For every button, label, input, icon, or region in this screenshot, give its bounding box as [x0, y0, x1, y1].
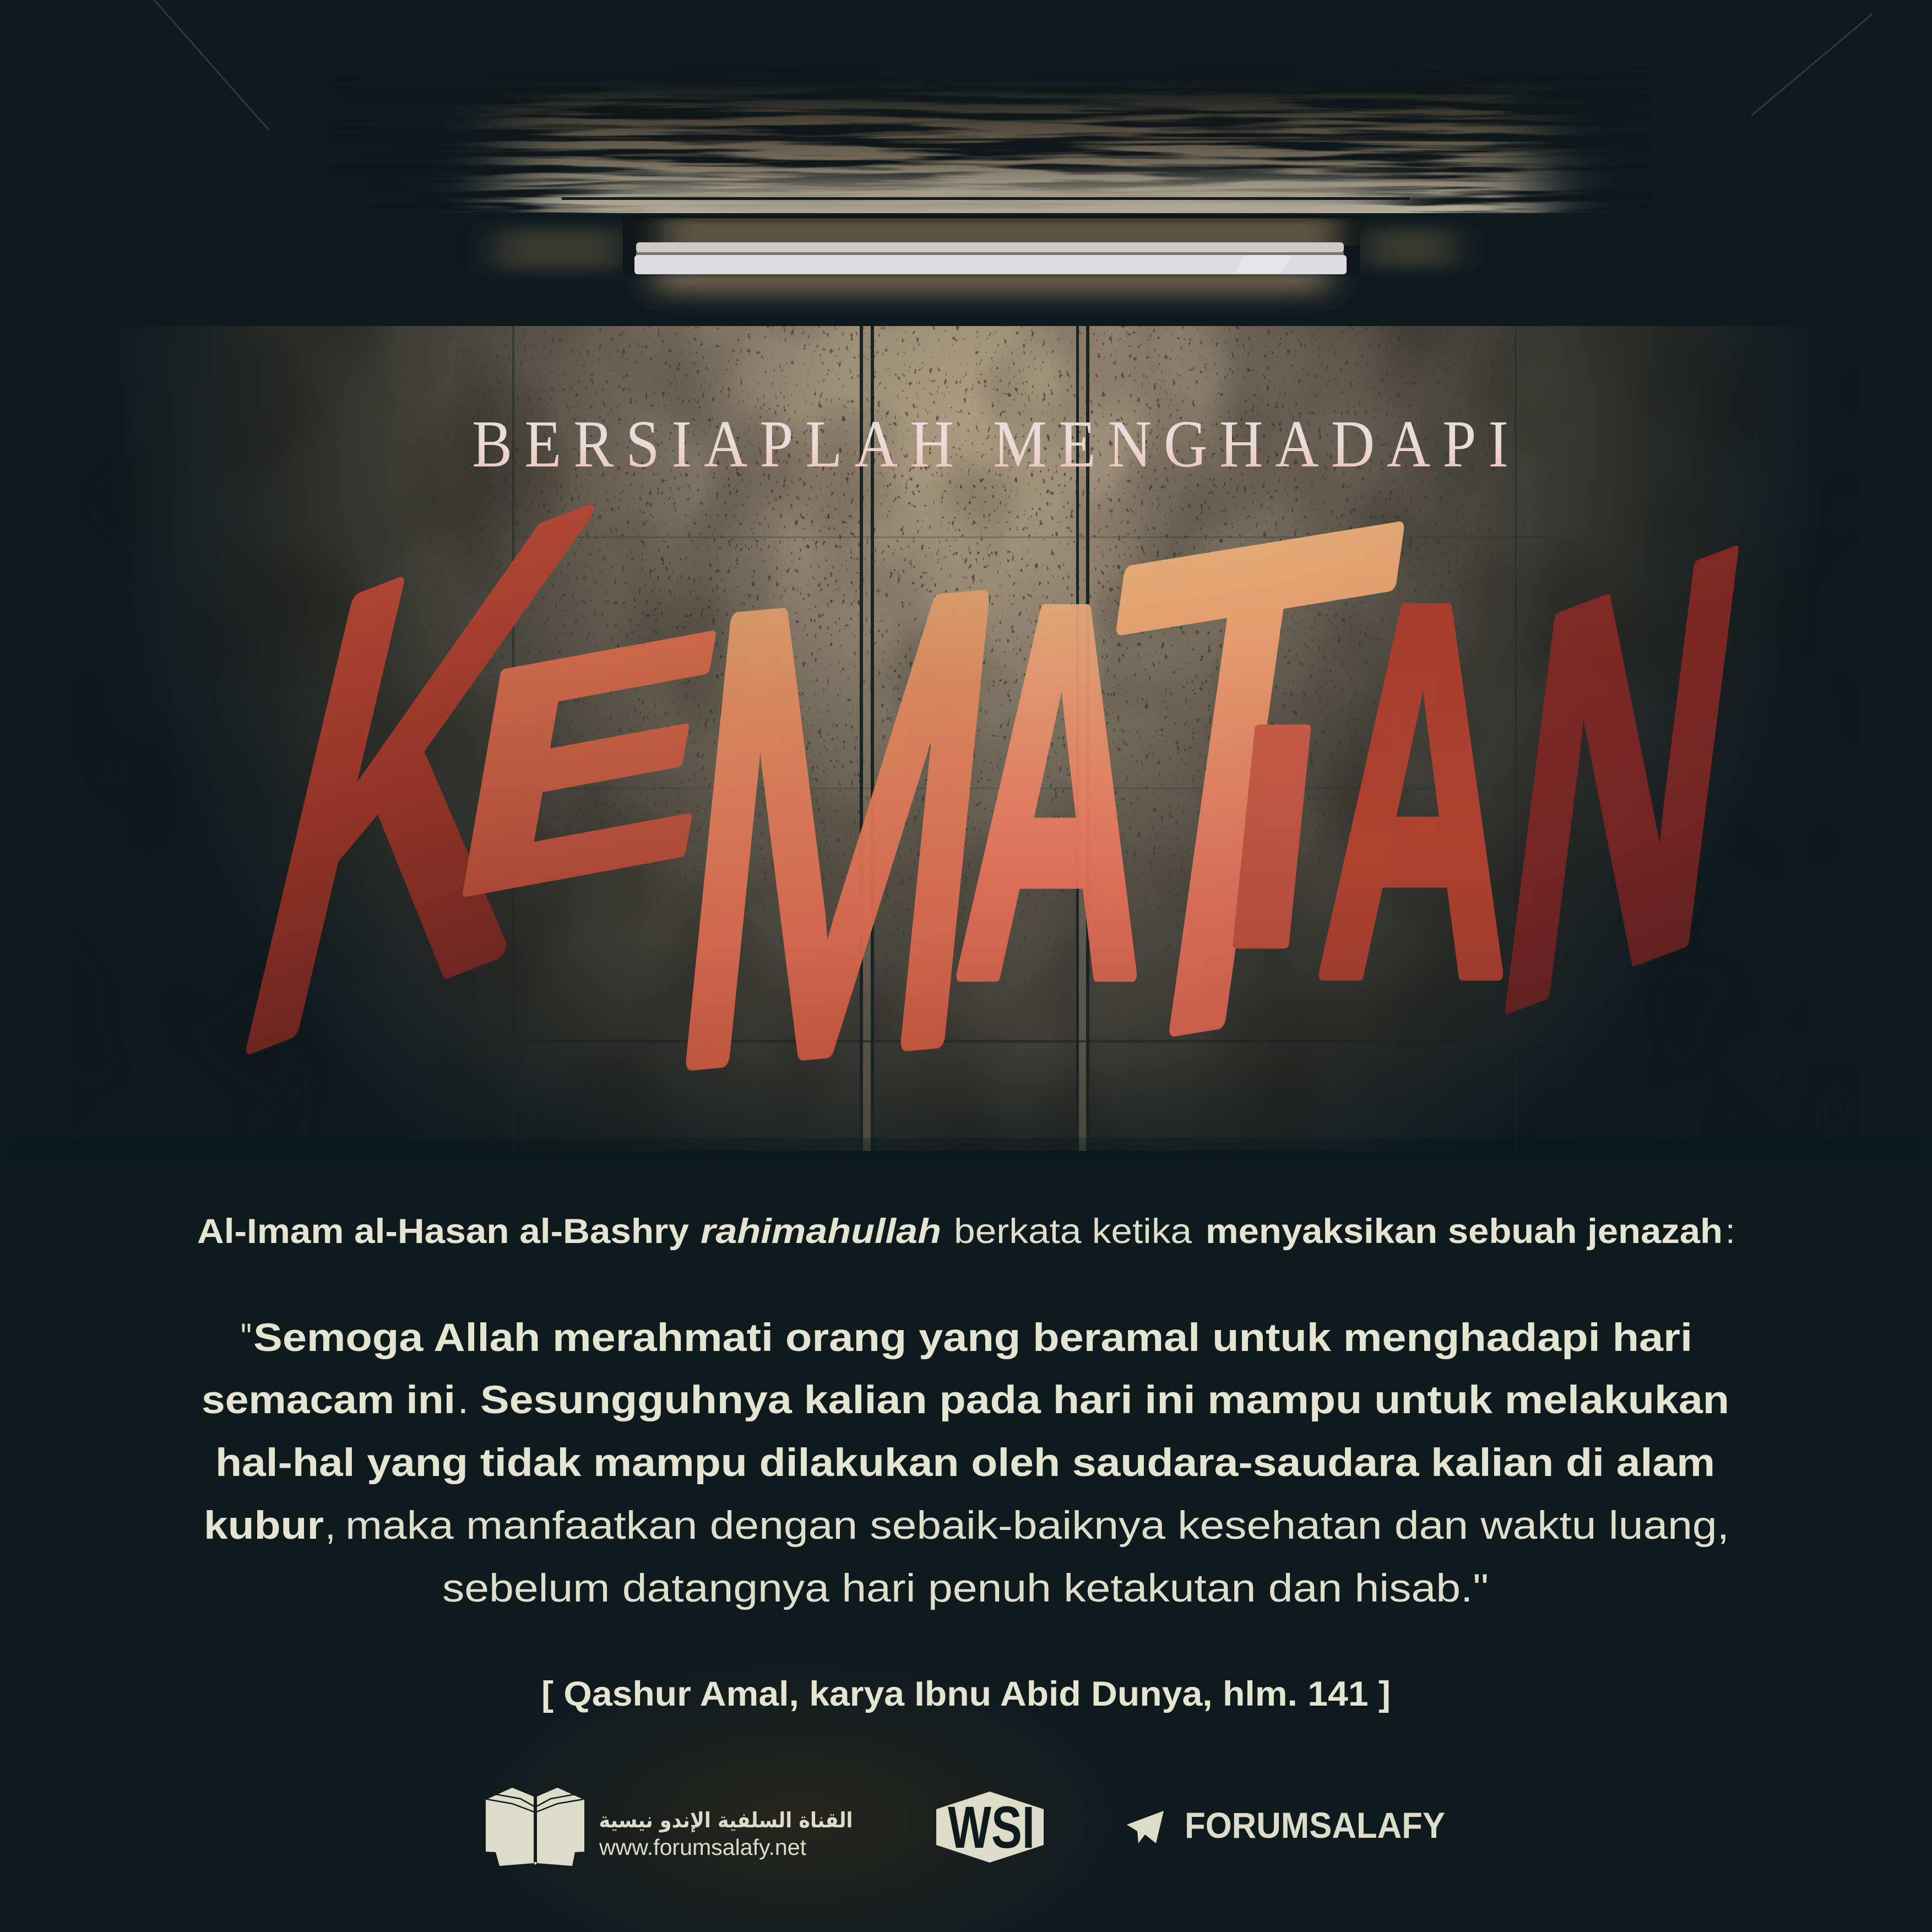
text block: attribution: [197, 1212, 1735, 1251]
title: Kematian brush lettering: I: [1208, 661, 1336, 1011]
logo: Qanat Salafiyah book and site: [486, 1788, 853, 1866]
text block: quotation: ,: [325, 1504, 336, 1548]
text block: quotation: .: [458, 1379, 469, 1422]
text block: quotation: kubur: [204, 1504, 324, 1548]
title: Kematian brush lettering: A: [1311, 495, 1527, 1086]
text block: quotation: ": [241, 1316, 252, 1360]
text block: quotation: [202, 1316, 1729, 1610]
icon: fluorescent lamp: [623, 216, 1360, 315]
title: Kematian brush lettering: [186, 366, 1771, 1197]
title: Kematian brush lettering: A: [947, 497, 1165, 1087]
logo: WSI hexagon: WSI: [948, 1794, 1035, 1860]
text block: quotation: sebelum datangnya hari penuh ketakutan dan hisab.": [442, 1567, 1489, 1610]
text block: quotation: semacam ini: [202, 1379, 455, 1422]
text block: attribution: menyaksikan sebuah jenazah: [1206, 1212, 1723, 1251]
side glow beside the lamp: [496, 229, 1454, 270]
text block: attribution: berkata ketika: [954, 1212, 1192, 1251]
text: website: www.forumsalafy.net: [599, 1835, 807, 1860]
icon: paper plane: [1127, 1811, 1164, 1843]
title: Kematian brush lettering: E: [430, 562, 745, 965]
title: Kematian brush lettering: T: [1033, 381, 1430, 1193]
title: Kematian brush lettering: K: [186, 366, 642, 1194]
panel: lit ceiling: [455, 89, 1591, 213]
title: Kematian brush lettering: M: [649, 462, 1026, 1197]
text block: quotation: Sesungguhnya kalian pada hari ini mampu untuk melakukan: [480, 1379, 1729, 1422]
title: Bersiaplah Menghadapi: BERSIAPLAH MENGHADAPI: [472, 408, 1508, 481]
panel: concrete wall: [163, 326, 1770, 1151]
logo: Forumsalafy telegram: [1127, 1805, 1445, 1846]
text block: source citation: [ Qashur Amal, karya Ibnu Abid Dunya, hlm. 141 ]: [541, 1675, 1391, 1713]
wall edge shading: [0, 1140, 1932, 1162]
text block: quotation: Semoga Allah merahmati orang yang beramal untuk menghadapi hari: [253, 1316, 1692, 1360]
text: Forumsalafy: FORUMSALAFY: [1185, 1805, 1445, 1846]
warm floor glow: [441, 1625, 1157, 1932]
title: Kematian brush lettering: N: [1473, 420, 1771, 1137]
text block: quotation: maka manfaatkan dengan sebaik-baiknya kesehatan dan waktu luang,: [345, 1504, 1729, 1548]
text block: quotation: hal-hal yang tidak mampu dilakukan oleh saudara-saudara kalian di alam: [215, 1441, 1715, 1485]
text: Arabic channel name: القناة السلفية الإندو نيسية: [599, 1808, 853, 1833]
icon: open book: [486, 1788, 584, 1866]
text block: attribution: :: [1725, 1212, 1735, 1251]
ceiling corner lines: [154, 0, 1873, 130]
text block: attribution: rahimahullah: [701, 1212, 941, 1251]
text block: attribution: Al-Imam al-Hasan al-Bashry: [197, 1212, 689, 1251]
